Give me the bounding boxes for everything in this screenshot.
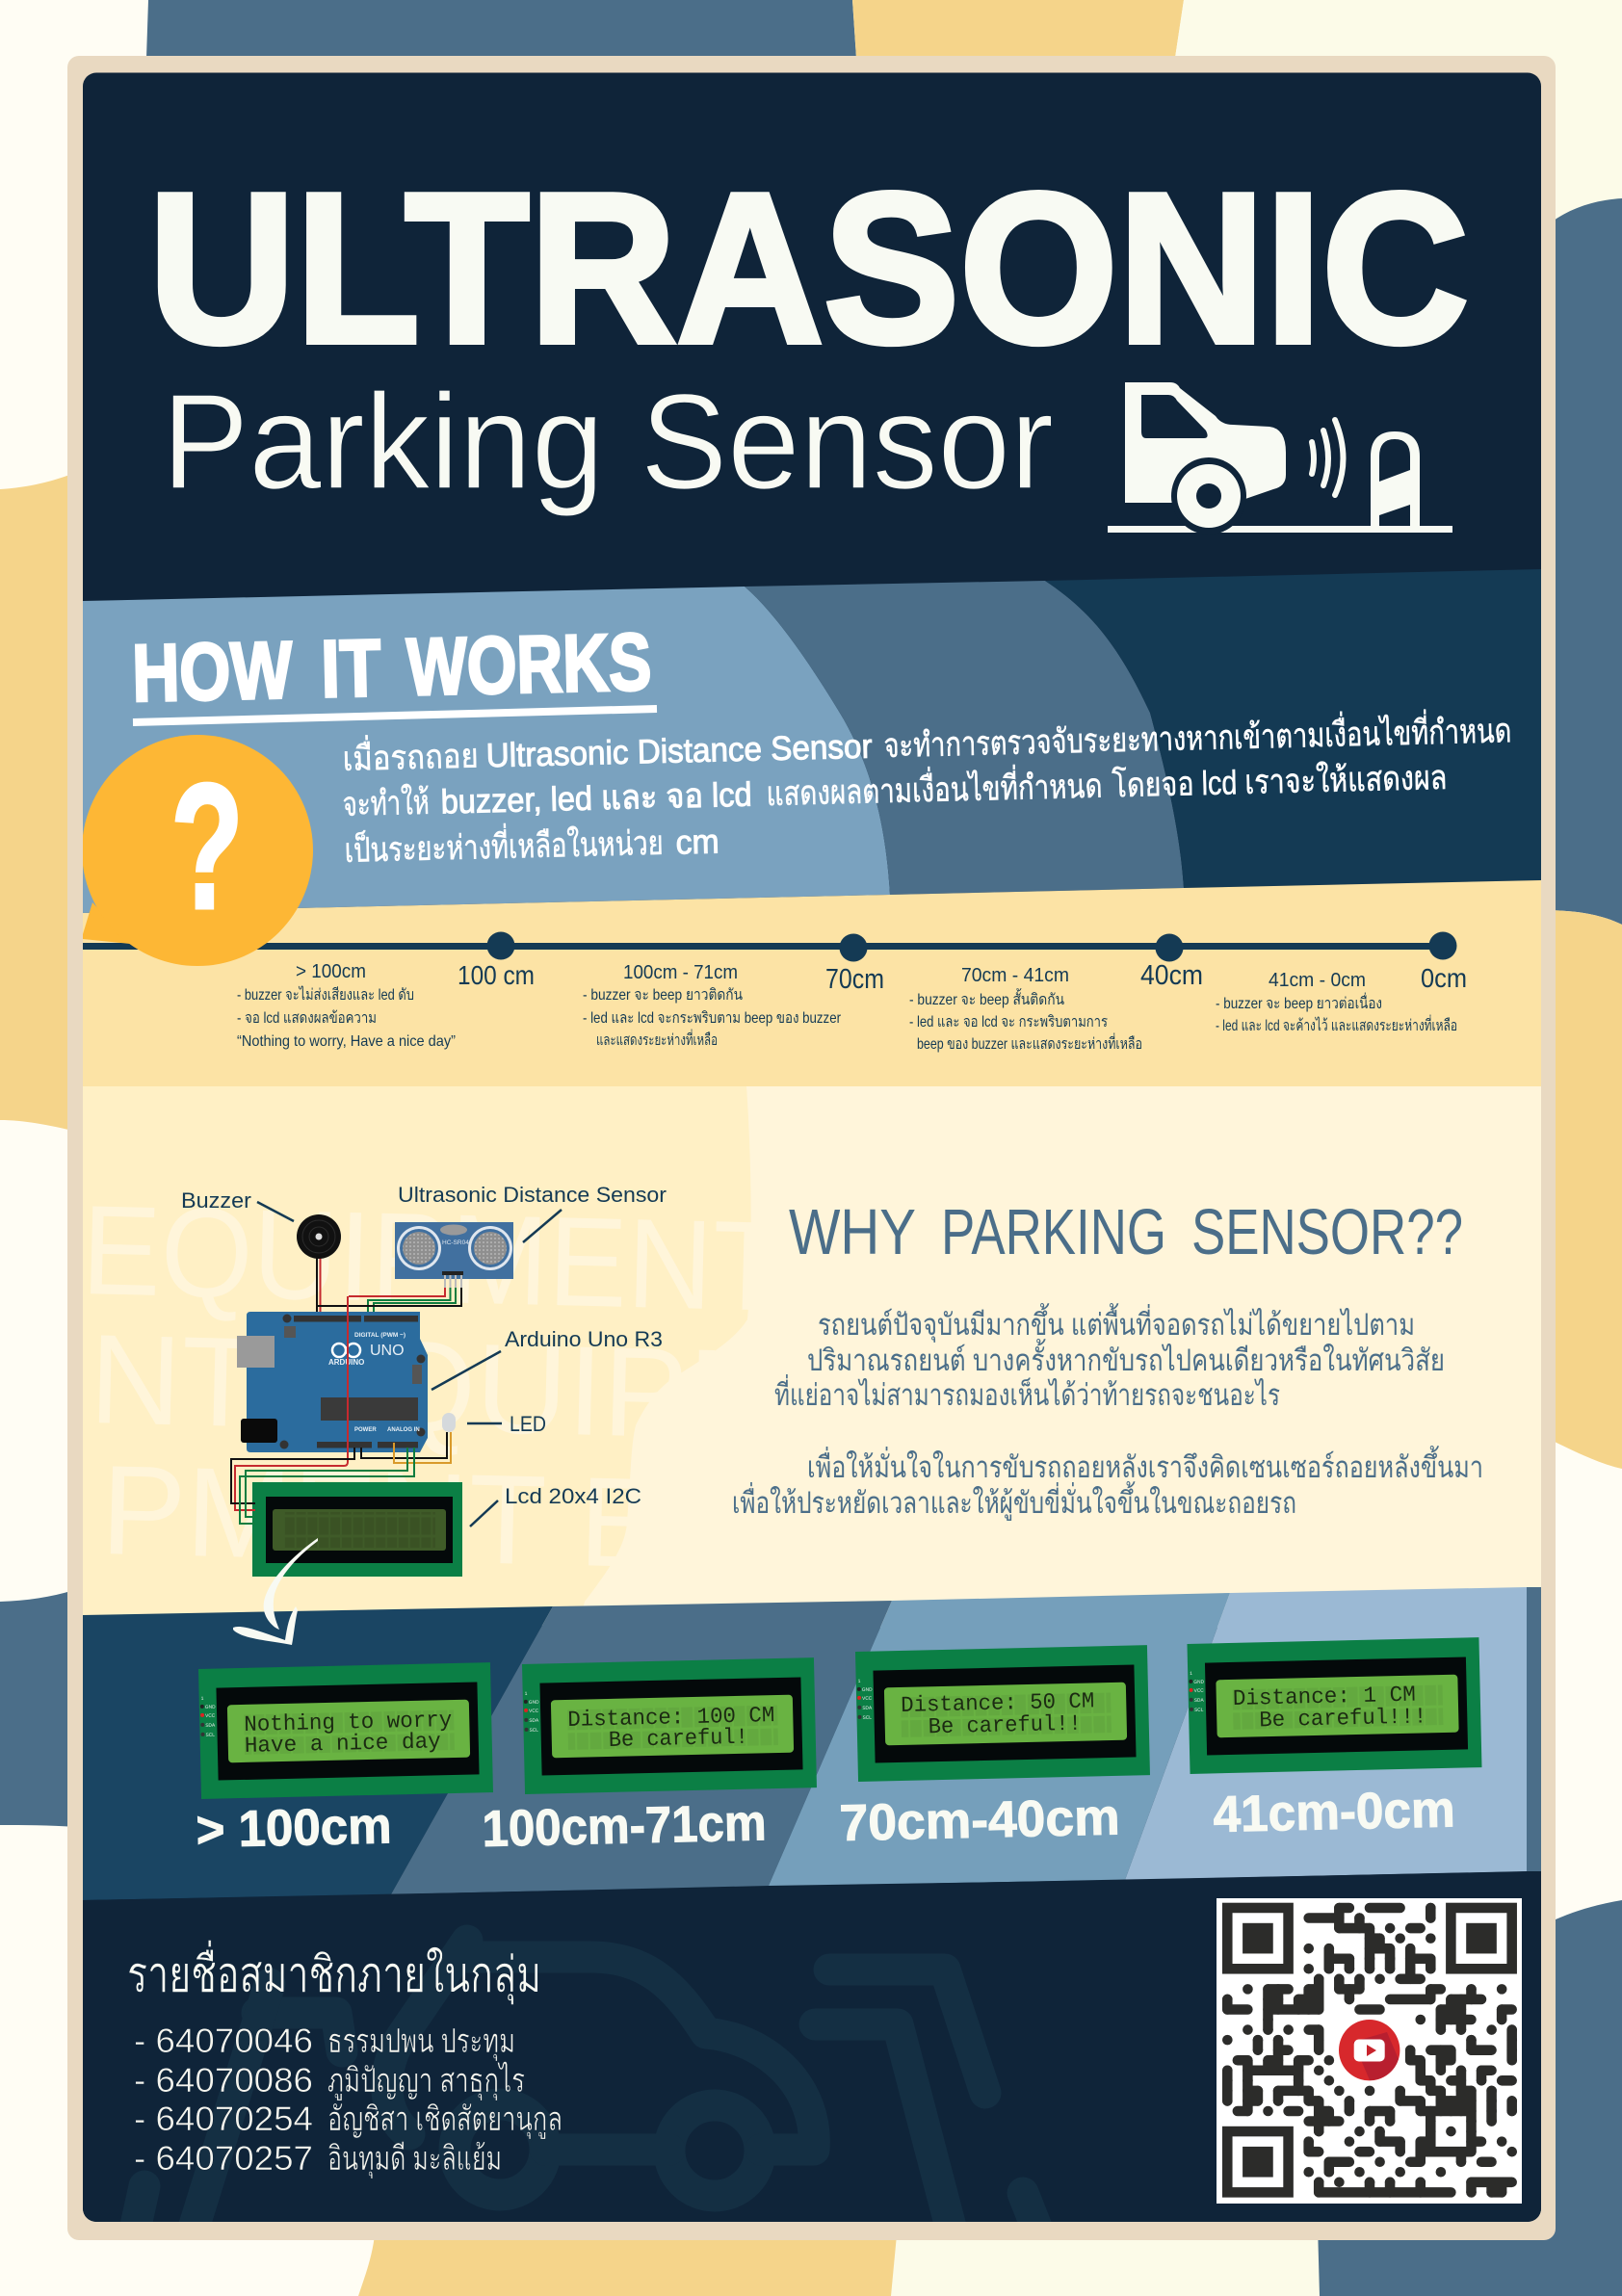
lcd state: nothing to worry: Have a nice day [245,1729,441,1759]
lcd state: distance 100: GND [529,1700,539,1706]
text block: member list: อินทุมดี มะลิแย้ม [327,2140,502,2179]
lcd state: nothing to worry: GND [205,1705,216,1710]
leader: lcd [470,1500,498,1526]
icon: arduino uno board: ANALOG IN [387,1427,420,1433]
text block: explanation [342,707,1512,870]
wiring diagram [181,1183,667,1577]
range description: 41cm to 0cm: - buzzer จะ beep ยาวต่อเนื่อง [1216,992,1382,1012]
arrow: from diagram to lcd states [233,1538,318,1645]
label: 70cm to 40cm: 70cm-40cm [839,1788,1120,1852]
lcd wires [231,1296,414,1524]
range description: 41cm to 0cm [1216,973,1456,1031]
label: buzzer: Buzzer [181,1188,251,1213]
heading underline [133,709,657,722]
icon: car reversing toward post [1108,382,1452,535]
lcd state: distance 1: SCL [1194,1708,1204,1713]
timeline labels: 70cm [825,964,884,995]
range description: over 100cm: “Nothing to worry, Have a nice day” [237,1033,456,1050]
text block: explanation: buzzer, led และ จอ lcd [440,776,752,822]
range description: 70cm to 41cm: 70cm - 41cm [961,965,1069,986]
icon: question mark speech bubble [82,735,313,966]
range description: 70cm to 41cm: - led และ จอ lcd จะ กระพริบตามการ [909,1014,1108,1031]
lcd state: distance 1: VCC [1194,1688,1204,1694]
lcd state: nothing to worry: VCC [205,1713,216,1719]
lcd state: distance 100: SDA [529,1718,539,1724]
heading: how it works: HOW [131,624,294,718]
lcd state: nothing to worry: Nothing to worry [244,1708,453,1737]
icon: ultrasonic sensor: HC-SR04 [442,1239,469,1246]
leader: arduino [432,1351,501,1390]
panel: lcd result states [83,1587,1541,1900]
sensor and buzzer wires [318,1288,462,1312]
title: ULTRASONIC: ULTRASONIC [148,149,1469,388]
range description: over 100cm [237,961,456,1050]
text block: member list: อัญชิสา เชิดสัตยานุกูล [327,2100,562,2139]
leader: led [467,1422,502,1424]
heading: how it works: IT [320,622,381,715]
lcd state: distance 50: SCL [862,1715,872,1721]
icon: arduino uno board: ARDUINO [328,1358,364,1367]
ghost watermark: equipment text [80,1179,1337,1610]
lcd state: distance 50: GND [862,1687,873,1693]
lcd state: distance 1: 1 [1190,1671,1192,1677]
lcd state: distance 100: Be careful! [609,1725,748,1753]
text block: member list [134,2022,562,2179]
panel: how it works band [83,569,1541,1086]
heading: why parking sensor [789,1209,1462,1254]
icon: lcd module [252,1482,462,1577]
icon: arduino uno board: DIGITAL (PWM ~) [354,1332,406,1339]
lcd state: distance 1: Distance: 1 CM [1233,1683,1416,1711]
lcd state: distance 1: Be careful!!! [1259,1704,1427,1733]
range description: 70cm to 41cm: - buzzer จะ beep สั้นติดกัน [909,988,1064,1008]
label: 41cm to 0cm: 41cm-0cm [1213,1781,1455,1843]
text block: member list: - 64070254 [134,2100,313,2138]
text block: explanation: cm [675,823,719,862]
icon: arduino uno board [237,1312,428,1452]
label: ultrasonic sensor: Ultrasonic Distance Sensor [398,1183,667,1207]
leader: sensor [523,1210,562,1242]
range description: 100cm to 71cm: และแสดงระยะห่างที่เหลือ [596,1029,718,1049]
text block: member list: - 64070086 [134,2062,313,2100]
lcd state: distance 50: SDA [862,1706,873,1711]
lcd state: distance 1: SDA [1194,1698,1205,1704]
lcd state: distance 1 [1187,1637,1481,1774]
lcd state: distance 100: Distance: 100 CM [567,1703,775,1733]
icon: question mark speech bubble: ? [170,747,244,947]
timeline labels: 0cm [1421,963,1467,993]
heading: why parking sensor: SENSOR?? [1191,1196,1463,1268]
text block: member list: ภูมิปัญญา สาธุกุไร [327,2061,525,2100]
lcd state: distance 50: 1 [858,1679,861,1684]
lcd state: distance 100: SCL [529,1728,538,1734]
text block: explanation: เป็นระยะห่างที่เหลือในหน่วย [344,820,664,870]
label: arduino: Arduino Uno R3 [505,1327,663,1351]
lcd state: distance 50 [855,1645,1150,1782]
text block: member list: ธรรมปพน ประทุม [327,2022,515,2061]
lcd state: distance 50: Distance: 50 CM [901,1688,1095,1718]
text block: why parking sensor: เพื่อให้ประหยัดเวลาและให้ผู้ขับขี่มั่นใจขึ้นในขณะถอยรถ [732,1481,1296,1521]
text block: why parking sensor: ที่แย่อาจไม่สามารถมองเห็นได้ว่าท้ายรถจะชนอะไร [774,1374,1280,1412]
lcd state: nothing to worry [198,1662,493,1799]
range description: over 100cm: - buzzer จะไม่ส่งเสียงและ led ดับ [237,985,414,1004]
lcd state: distance 100: VCC [529,1709,539,1714]
range description: 100cm to 71cm: - led และ lcd จะกระพริบตาม beep ของ buzzer [583,1010,842,1027]
panel: footer [83,1871,1541,2234]
text block: explanation: แสดงผลตามเงื่อนไขที่กำหนด [766,763,1103,813]
lcd state: distance 50: VCC [862,1696,873,1702]
text block: explanation: เมื่อรถถอย [342,733,479,778]
lcd state: distance 100: 1 [525,1691,528,1697]
text block: why parking sensor: ปริมาณรถยนต์ บางครั้งหากขับรถไปคนเดียวหรือในทัศนวิสัย [807,1339,1445,1377]
range description: 41cm to 0cm: 41cm - 0cm [1269,970,1366,991]
text block: why parking sensor: เพื่อให้มั่นใจในการขับรถถอยหลังเราจึงคิดเซนเซอร์ถอยหลังขึ้นมา [807,1446,1483,1484]
heading: why parking sensor: WHY [789,1196,916,1268]
panel: equipment and why section [80,1086,1541,1628]
icon: led [361,1413,456,1463]
text block: member list: - 64070046 [134,2022,313,2060]
timeline [83,932,1456,961]
text block: member list: - 64070257 [134,2140,313,2178]
heading: how it works: WORKS [406,616,652,713]
range description: 100cm to 71cm: 100cm - 71cm [623,962,738,983]
range description: 100cm to 71cm [583,962,842,1049]
ghost watermark: equipment text: NT EQUIPMENT [88,1308,1050,1473]
label: led: LED [510,1412,546,1436]
lcd state: distance 100 [522,1657,817,1794]
range description: 70cm to 41cm [909,965,1142,1053]
watermark: car with sound waves [134,1941,1039,2234]
icon: buzzer [297,1214,341,1319]
timeline labels: 100 cm [458,960,535,990]
heading: how it works [135,632,650,703]
range description: over 100cm: > 100cm [296,961,366,982]
heading: team members: รายชื่อสมาชิกภายในกลุ่ม [127,1940,541,2005]
lcd state: nothing to worry: 1 [201,1696,204,1702]
label: 100cm to 71cm: 100cm-71cm [482,1794,767,1858]
timeline labels: 40cm [1140,960,1203,991]
text block: explanation: โดยจอ lcd เราจะให้แสดงผล [1112,758,1448,804]
icon: arduino uno board: UNO [370,1343,405,1359]
ghost watermark: equipment text: PMENT EQUIPMENT [99,1439,1337,1610]
QR code [1216,1898,1522,2204]
label: lcd: Lcd 20x4 I2C [505,1484,641,1508]
text block: why parking sensor: รถยนต์ปัจจุบันมีมากขึ้น แต่พื้นที่จอดรถไม่ได้ขยายไปตาม [818,1303,1415,1344]
heading: why parking sensor: PARKING [941,1196,1166,1268]
leader: buzzer [257,1202,294,1221]
icon: youtube badge [1339,2020,1400,2080]
text block: why parking sensor [732,1303,1483,1521]
icon: arduino uno board: POWER [354,1427,377,1433]
lcd state: distance 1: GND [1193,1680,1205,1685]
range description: over 100cm: - จอ lcd แสดงผลข้อความ [237,1009,377,1027]
timeline labels [458,965,1466,988]
icon: ultrasonic sensor [395,1222,513,1288]
text block: explanation: จะทำให้ [342,783,430,823]
ghost watermark: equipment text: EQUIPMENT [80,1179,787,1338]
lcd state: nothing to worry: SDA [205,1723,216,1729]
range description: 41cm to 0cm: - led และ lcd จะค้างไว้ และแสดงระยะห่างที่เหลือ [1216,1014,1457,1034]
label: over 100cm: > 100cm [196,1797,392,1859]
range description: 100cm to 71cm: - buzzer จะ beep ยาวติดกัน [583,987,743,1004]
lcd state: distance 50: Be careful!! [929,1711,1082,1739]
subtitle: Parking Sensor: Parking Sensor [162,365,1054,517]
text block: explanation: Ultrasonic Distance Sensor [485,728,873,774]
lcd state: nothing to worry: SCL [205,1733,215,1738]
range description: 70cm to 41cm: beep ของ buzzer และแสดงระยะห่างที่เหลือ [917,1032,1142,1053]
